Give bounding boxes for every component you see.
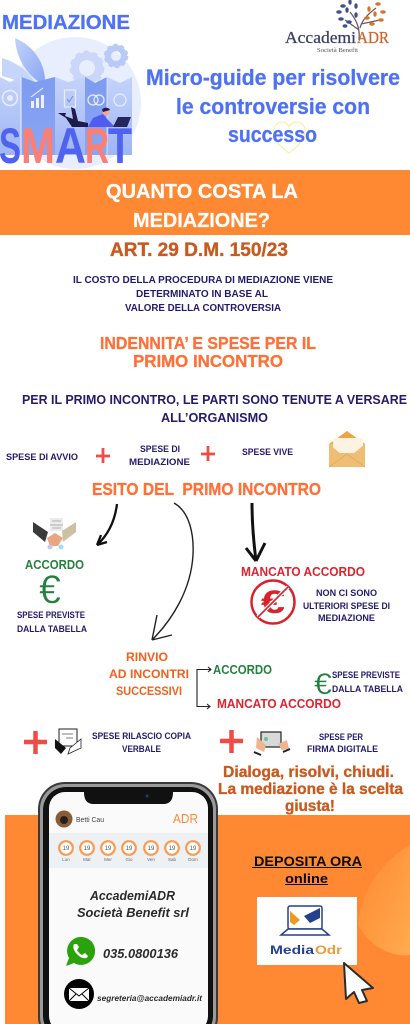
text block: spese previste successive (332, 670, 404, 694)
calendar strip: 19 (148, 846, 155, 852)
label: accordo: ACCORDO (25, 558, 84, 572)
phone mockup (38, 782, 218, 1024)
text block: cost of the procedure: DETERMINATO IN BASE AL (136, 289, 268, 300)
text block: non ci sono ulteriori spese: NON CI SONO (316, 588, 377, 598)
label: mancato accordo: MANCATO ACCORDO (241, 565, 365, 579)
decorative heart outline behind title (274, 122, 305, 153)
icon: mouse cursor (344, 963, 373, 1003)
illustration: smart mediation: A (55, 118, 86, 174)
adr label: ADR (173, 811, 198, 826)
title: micro-guide (146, 65, 400, 147)
text block: copia verbale (92, 731, 192, 754)
text block: spese previste successive: DALLA TABELLA (332, 684, 404, 694)
slogan: La mediazione è la scelta (218, 781, 403, 798)
avatar and user name (56, 810, 104, 828)
text block: firma digitale: FIRMA DIGITALE (307, 744, 378, 754)
calendar strip: Mar (83, 857, 91, 862)
text block: first meeting: PER IL PRIMO INCONTRO, LE PARTI SONO TENUTE A VERSARE (22, 393, 407, 407)
text block: spese previste: SPESE PREVISTE (17, 610, 85, 620)
logo: accademiadr: Società Benefit (317, 47, 358, 54)
arrow: to mancato accordo (246, 503, 265, 561)
icon: euro: € (39, 568, 61, 612)
text block: non ci sono ulteriori spese (303, 588, 390, 623)
icon: handshake agreement (33, 518, 76, 550)
email address: segreteria@accademiadr.it (97, 994, 202, 1003)
subheading: article: ART. 29 D.M. 150/23 (110, 240, 288, 261)
text block: spese previste: DALLA TABELLA (17, 624, 88, 634)
company name: AccademiADR (89, 889, 175, 903)
calendar strip: 19 (169, 846, 176, 852)
logo: accademiadr: ADR (357, 28, 389, 47)
illustration: smart mediation: S (0, 118, 21, 174)
avatar and user name: Betti Cau (76, 817, 104, 824)
label: mancato accordo successive: MANCATO ACCORDO (217, 697, 341, 711)
heading: mediazione: MEDIAZIONE (2, 11, 130, 34)
orange banner: quanto costa la mediazione: MEDIAZIONE? (133, 209, 270, 232)
text block: copia verbale: VERBALE (122, 744, 161, 754)
slogan: giusta! (285, 798, 335, 815)
text block: first meeting: ALL’ORGANISMO (161, 411, 268, 425)
text block: cost of the procedure (73, 275, 333, 314)
heading: indennita e spese: PRIMO INCONTRO (133, 351, 283, 371)
calendar strip: 19 (190, 846, 197, 852)
calendar strip: Ven (147, 857, 155, 862)
text block: first meeting (22, 393, 407, 425)
slogan (218, 764, 403, 815)
icon: no euro: € (261, 584, 285, 620)
cost row: avvio, mediazione, vive (6, 444, 293, 467)
calendar strip: 19 (63, 846, 70, 852)
illustration: smart mediation: T (108, 118, 132, 174)
calendar strip: 19 (84, 846, 91, 852)
cost row: avvio, mediazione, vive: SPESE VIVE (242, 447, 293, 457)
heading: esito del primo incontro: ESITO DEL PRIMO INCONTRO (92, 479, 321, 499)
calendar strip (49, 833, 208, 868)
slogan: Dialoga, risolvi, chiudi. (223, 764, 394, 781)
arrow: bracket to outcomes (197, 667, 211, 709)
icon: whatsapp (66, 937, 95, 966)
illustration: smart mediation (0, 37, 141, 174)
illustration: smart mediation: M (21, 118, 55, 174)
panel: orange contact background (5, 815, 410, 1024)
arrow: to accordo (97, 504, 117, 545)
logo card: mediaodr (257, 897, 357, 965)
icon: no euro (252, 580, 294, 624)
calendar strip: Mer (104, 857, 112, 862)
text block: spese previste successive: SPESE PREVISTE (332, 670, 400, 680)
illustration: smart mediation: R (85, 118, 109, 174)
heading: indennita e spese (100, 333, 316, 371)
title: micro-guide: le controversie con (176, 94, 370, 119)
cost row: avvio, mediazione, vive: SPESE DI AVVIO (6, 452, 78, 462)
text block: firma digitale: SPESE PER (319, 732, 364, 742)
heading: indennita e spese: INDENNITA’ E SPESE PER IL (100, 333, 316, 353)
icon: email (64, 979, 94, 1009)
call to action: deposita ora online: online (285, 871, 328, 886)
text block: copia verbale: SPESE RILASCIO COPIA (92, 731, 192, 741)
logo: accademiadr (285, 0, 389, 54)
arrow: to rinvio (152, 503, 193, 640)
icon: envelope (329, 431, 365, 467)
call to action: deposita ora online: DEPOSITA ORA (254, 854, 362, 869)
icon: tablet signature (254, 732, 290, 755)
text block: rinvio: SUCCESSIVI (116, 684, 182, 698)
text block: rinvio: RINVIO (126, 650, 168, 664)
text block: rinvio (109, 650, 189, 698)
calendar strip: 19 (126, 846, 133, 852)
calendar strip: Dom (188, 857, 198, 862)
calendar strip: Sab (168, 857, 176, 862)
icon: plus copy (24, 731, 47, 754)
logo card: mediaodr: Odr (315, 945, 343, 957)
cost row: avvio, mediazione, vive: MEDIAZIONE (129, 457, 190, 467)
text block: non ci sono ulteriori spese: MEDIAZIONE (318, 613, 375, 623)
icon: signed document (55, 729, 81, 754)
company name: Società Benefit srl (77, 906, 190, 920)
orange banner: quanto costa la mediazione (0, 170, 410, 235)
phone number: 035.0800136 (103, 947, 179, 961)
icon: euro small: € (314, 668, 332, 701)
logo: accademiadr: Accademi (285, 28, 356, 47)
calendar strip: 19 (105, 846, 112, 852)
logo card: mediaodr: Media (270, 945, 315, 957)
title: micro-guide: Micro-guide per risolvere (146, 65, 400, 90)
call to action: deposita ora online (252, 854, 362, 886)
text block: rinvio: AD INCONTRI (109, 667, 189, 681)
company name (77, 889, 190, 920)
calendar strip: Lun (62, 857, 70, 862)
text block: cost of the procedure: IL COSTO DELLA PROCEDURA DI MEDIAZIONE VIENE (73, 275, 333, 286)
text block: spese previste (17, 610, 88, 634)
text block: non ci sono ulteriori spese: ULTERIORI SPESE DI (303, 601, 390, 611)
text block: cost of the procedure: VALORE DELLA CONTROVERSIA (125, 303, 281, 314)
icon: plus signature (220, 730, 243, 753)
title: micro-guide: successo (228, 122, 317, 147)
calendar strip: Gio (125, 857, 133, 862)
text block: firma digitale (307, 732, 378, 754)
orange banner: quanto costa la mediazione: QUANTO COSTA LA (106, 180, 298, 203)
cost row: avvio, mediazione, vive: SPESE DI (140, 444, 180, 454)
label: accordo successive: ACCORDO (213, 663, 272, 677)
